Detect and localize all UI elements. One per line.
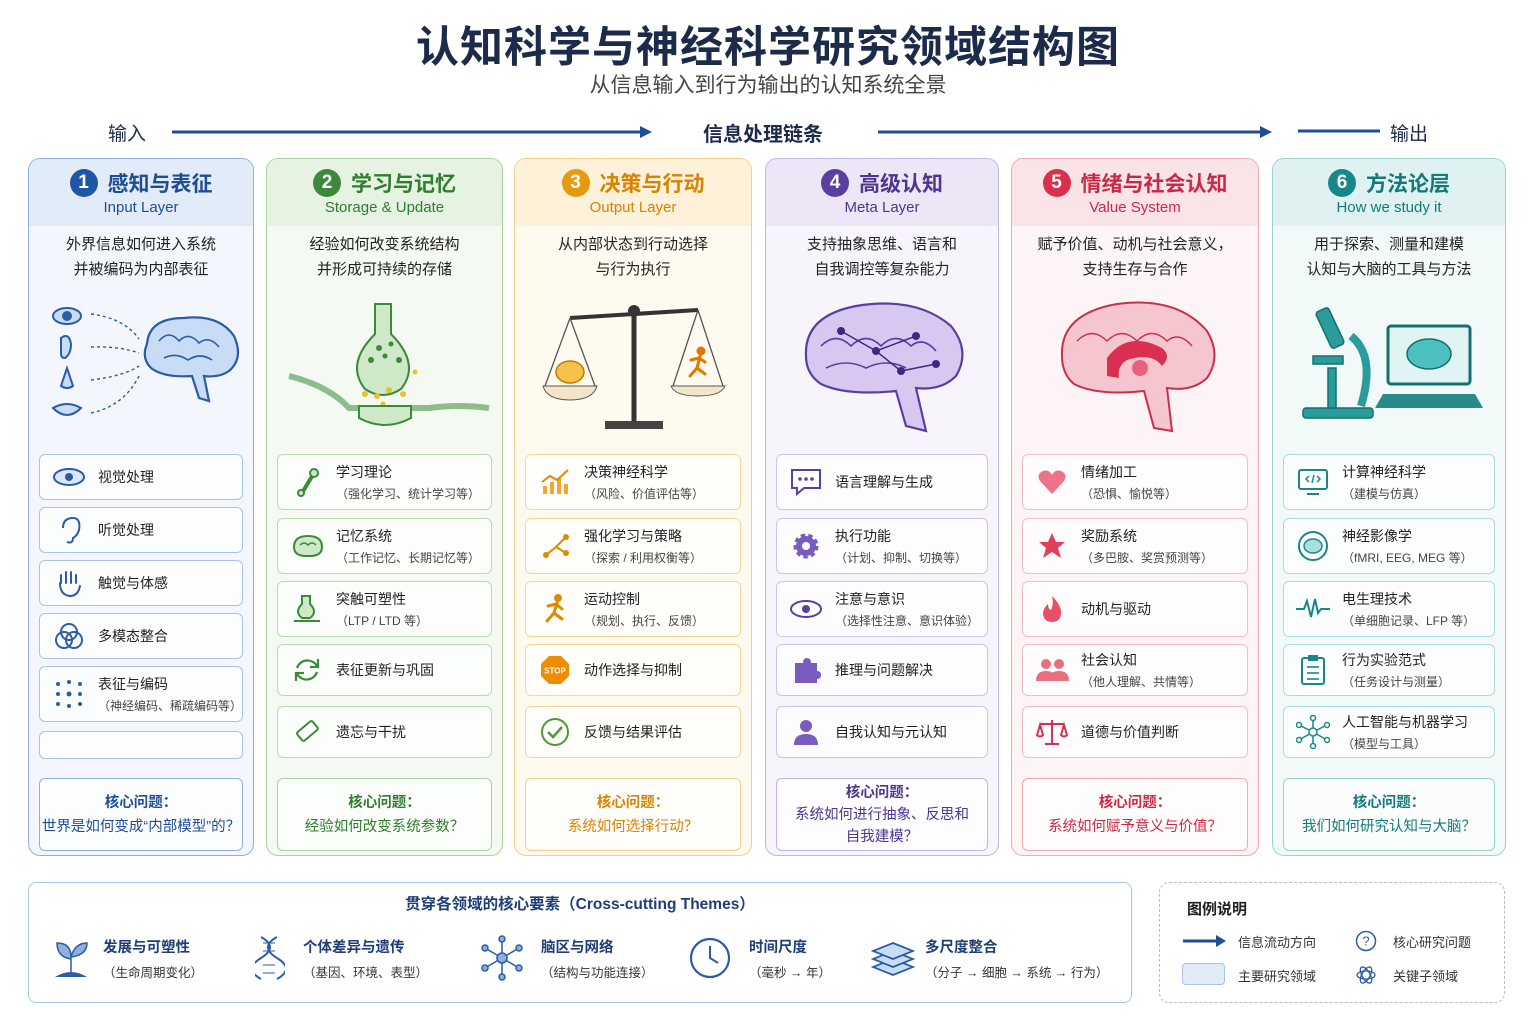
legend: flow arrow: [1183, 935, 1316, 950]
arrow: chain to output: [878, 126, 1272, 138]
core question 5: 核心问题：: [1099, 794, 1171, 810]
description 4: [807, 236, 957, 278]
header 3: 决策与行动: [600, 173, 704, 196]
item: memory systems: 记忆系统: [336, 528, 392, 544]
header 6: 方法论层: [1366, 173, 1450, 196]
item: learning theory: [277, 454, 492, 510]
item: computational neuroscience: [1283, 454, 1495, 510]
flow: output label: 输出: [1390, 124, 1428, 145]
panel 3: decision & action: [514, 158, 752, 856]
core question 2: [277, 778, 492, 851]
item: social cognition: 社会认知: [1081, 652, 1137, 668]
themes heading: 贯穿各领域的核心要素（Cross-cutting Themes）: [405, 896, 755, 913]
item: neuroimaging: 神经影像学: [1342, 528, 1412, 544]
item: RL policy: 强化学习与策略: [584, 528, 682, 544]
item: multimodal: 多模态整合: [98, 628, 168, 644]
item: AI & ML: 人工智能与机器学习: [1342, 714, 1468, 730]
item: motor control: 运动控制: [584, 591, 640, 607]
item: emotion: （恐惧、愉悦等）: [1081, 487, 1177, 501]
legend title: 图例说明: [1187, 901, 1247, 918]
description 5: 支持生存与合作: [1082, 261, 1188, 278]
description 3: [558, 236, 708, 278]
item: touch: 触觉与体感: [98, 575, 168, 591]
item: social cognition: （他人理解、共情等）: [1081, 675, 1201, 689]
legend: domain box: [1182, 963, 1316, 985]
item: reward: [1022, 518, 1248, 574]
item: action selection: [525, 644, 741, 696]
header 5: 5: [1051, 172, 1062, 193]
legend: core question: [1356, 930, 1471, 952]
item: feedback: [525, 706, 741, 758]
item: behavioral paradigms: 行为实验范式: [1342, 652, 1426, 668]
core question 5: 系统如何赋予意义与价值？: [1048, 818, 1222, 834]
description 3: 从内部状态到行动选择: [558, 236, 708, 253]
description 6: 认知与大脑的工具与方法: [1306, 261, 1472, 278]
item: neuroimaging: （fMRI, EEG, MEG 等）: [1342, 551, 1473, 565]
item: computational neuroscience: （建模与仿真）: [1342, 487, 1426, 501]
core question 4: 自我建模？: [846, 828, 918, 844]
core question 6: 我们如何研究认知与大脑？: [1302, 818, 1476, 834]
description 5: 赋予价值、动机与社会意义，: [1037, 236, 1232, 253]
theme: time scale: 时间尺度: [749, 940, 807, 956]
item: emotion: [1022, 454, 1248, 510]
item: motor control: [525, 581, 741, 637]
header 3: [515, 159, 751, 226]
header 5: [1012, 159, 1258, 226]
core question 4: 系统如何进行抽象、反思和: [795, 806, 969, 822]
item: learning theory: 学习理论: [336, 464, 392, 480]
header 2: Storage & Update: [325, 199, 444, 216]
item: action selection: STOP: [544, 666, 566, 676]
theme: brain networks: 脑区与网络: [541, 940, 614, 956]
item: representation update: [277, 644, 492, 696]
item: reward: 奖励系统: [1081, 528, 1137, 544]
item: self: 自我认知与元认知: [835, 724, 947, 740]
item: visual: [39, 454, 243, 500]
empty slot: [39, 731, 243, 759]
item: executive function: （计划、抑制、切换等）: [835, 551, 967, 565]
core question 6: [1283, 778, 1495, 851]
subtitle: 从信息输入到行为输出的认知系统全景: [590, 74, 946, 97]
header 3: 3: [570, 172, 581, 193]
core question 4: [776, 778, 988, 851]
description 2: 经验如何改变系统结构: [309, 236, 460, 253]
arrow: input to chain: [172, 126, 652, 138]
item: RL policy: [525, 518, 741, 574]
title: 认知科学与神经科学研究领域结构图: [416, 24, 1120, 72]
item: forgetting: [277, 706, 492, 758]
panel 4: higher cognition: [765, 158, 999, 856]
description 4: 自我调控等复杂能力: [814, 261, 950, 278]
legend: sub-domain: [1356, 966, 1458, 984]
item: motor control: （规划、执行、反馈）: [584, 614, 704, 628]
header 5: Value System: [1089, 199, 1181, 216]
illustration: scale: [542, 305, 726, 429]
illustration: purple brain network: [804, 302, 964, 432]
core question 1: 核心问题：: [105, 794, 177, 810]
illustration: microscope and monitor: [1302, 307, 1483, 419]
item: feedback: 反馈与结果评估: [584, 724, 682, 740]
header 4: 4: [830, 172, 840, 193]
item: motivation: [1022, 581, 1248, 637]
header 4: 高级认知: [859, 173, 943, 196]
description 5: [1037, 236, 1232, 278]
item: touch: [39, 560, 243, 606]
item: forgetting: 遗忘与干扰: [336, 724, 406, 740]
item: executive function: 执行功能: [835, 528, 891, 544]
illustration: synapse: [288, 303, 490, 426]
item: social cognition: [1022, 644, 1248, 696]
description 3: 与行为执行: [595, 261, 670, 278]
header 2: 2: [322, 172, 332, 193]
item: encoding: （神经编码、稀疏编码等）: [98, 699, 242, 713]
legend: core question: 核心研究问题: [1393, 935, 1471, 950]
item: attention: （选择性注意、意识体验）: [835, 614, 979, 628]
illustration: limbic brain: [1060, 302, 1216, 432]
header 2: 学习与记忆: [351, 173, 456, 196]
item: memory systems: [277, 518, 492, 574]
item: decision neuroscience: [525, 454, 741, 510]
header 5: 情绪与社会认知: [1080, 173, 1228, 196]
item: learning theory: （强化学习、统计学习等）: [336, 487, 480, 501]
item: computational neuroscience: 计算神经科学: [1342, 464, 1426, 480]
core question 6: 核心问题：: [1353, 794, 1425, 810]
item: electrophysiology: 电生理技术: [1342, 591, 1412, 607]
panel 5: emotion & social: [1011, 158, 1259, 856]
panel 6: methods: [1272, 158, 1506, 856]
item: reasoning: 推理与问题解决: [835, 662, 933, 678]
description 2: [309, 236, 460, 278]
item: encoding: 表征与编码: [98, 676, 168, 692]
core question 2: 核心问题：: [348, 794, 421, 810]
header 6: How we study it: [1336, 199, 1442, 216]
panel 1: perception: [28, 158, 254, 856]
core question 5: [1022, 778, 1248, 851]
theme: multiscale: （分子 → 细胞 → 系统 → 行为）: [925, 966, 1108, 980]
illustration: senses to brain: [51, 307, 240, 416]
description 6: 用于探索、测量和建模: [1314, 236, 1464, 253]
header 1: 1: [78, 172, 89, 193]
item: executive function: [776, 518, 988, 574]
item: electrophysiology: （单细胞记录、LFP 等）: [1342, 614, 1475, 628]
theme: multiscale: [871, 939, 1108, 980]
item: RL policy: （探索 / 利用权衡等）: [584, 551, 702, 565]
item: behavioral paradigms: （任务设计与测量）: [1342, 675, 1450, 689]
legend: domain box: 主要研究领域: [1238, 969, 1316, 984]
item: neuroimaging: [1283, 518, 1495, 574]
item: AI & ML: [1283, 706, 1495, 758]
item: decision neuroscience: （风险、价值评估等）: [584, 487, 704, 501]
item: memory systems: （工作记忆、长期记忆等）: [336, 551, 480, 565]
header 1: Input Layer: [103, 199, 179, 216]
theme: development: [55, 939, 203, 980]
item: synaptic plasticity: 突触可塑性: [336, 591, 406, 607]
core question 2: 经验如何改变系统参数？: [305, 818, 464, 834]
item: visual: 视觉处理: [98, 469, 154, 485]
core question 3: 核心问题：: [597, 794, 669, 810]
flow: output label: [1298, 124, 1428, 145]
description 6: [1306, 236, 1472, 278]
item: attention: 注意与意识: [835, 591, 905, 607]
theme: multiscale: 多尺度整合: [925, 940, 998, 956]
theme: development: （生命周期变化）: [103, 966, 203, 980]
item: encoding: [39, 666, 243, 722]
item: morality: [1022, 706, 1248, 758]
legend: sub-domain: 关键子领域: [1393, 969, 1458, 984]
theme: individual differences: 个体差异与遗传: [303, 940, 404, 956]
description 1: 并被编码为内部表征: [73, 261, 208, 278]
header 1: 感知与表征: [108, 173, 212, 196]
item: reward: （多巴胺、奖赏预测等）: [1081, 551, 1213, 565]
flow: chain label: 信息处理链条: [703, 124, 823, 146]
item: multimodal: [39, 613, 243, 659]
item: auditory: [39, 507, 243, 553]
legend: [1159, 882, 1505, 1003]
item: action selection: 动作选择与抑制: [584, 662, 682, 678]
item: attention: [776, 581, 988, 637]
item: reasoning: [776, 644, 988, 696]
header 1: [29, 159, 253, 226]
theme: brain networks: [481, 935, 654, 981]
theme: individual differences: [255, 936, 428, 980]
header 3: Output Layer: [590, 199, 676, 216]
item: language: [776, 454, 988, 510]
header 6: [1273, 159, 1505, 226]
description 4: 支持抽象思维、语言和: [807, 236, 957, 253]
header 4: [766, 159, 998, 226]
panel 2: learning & memory: [266, 158, 503, 856]
header 2: [267, 159, 502, 226]
description 2: 并形成可持续的存储: [317, 261, 452, 278]
core question 1: 世界是如何变成“内部模型”的？: [42, 818, 240, 834]
theme: brain networks: （结构与功能连接）: [541, 966, 654, 980]
item: synaptic plasticity: [277, 581, 492, 637]
core question 3: 系统如何选择行动？: [568, 818, 698, 834]
item: language: 语言理解与生成: [835, 474, 933, 490]
item: representation update: 表征更新与巩固: [336, 662, 434, 678]
core question 3: [525, 778, 741, 851]
header 6: 6: [1337, 172, 1347, 193]
item: emotion: 情绪加工: [1081, 464, 1137, 480]
header 4: Meta Layer: [844, 199, 920, 216]
theme: time scale: （毫秒 → 年）: [749, 966, 831, 980]
theme: individual differences: （基因、环境、表型）: [303, 966, 428, 980]
description 1: [66, 236, 216, 278]
panel: cross-cutting themes: [28, 882, 1132, 1003]
item: motivation: 动机与驱动: [1081, 601, 1151, 617]
item: electrophysiology: [1283, 581, 1495, 637]
legend: core question: ?: [1362, 934, 1370, 948]
item: morality: 道德与价值判断: [1081, 724, 1179, 740]
item: self: [776, 706, 988, 758]
legend: flow arrow: 信息流动方向: [1238, 935, 1316, 950]
theme: development: 发展与可塑性: [103, 940, 190, 956]
core question 1: [39, 778, 243, 851]
item: auditory: 听觉处理: [98, 522, 154, 538]
item: AI & ML: （模型与工具）: [1342, 737, 1426, 751]
description 1: 外界信息如何进入系统: [66, 236, 216, 253]
flow: input label: 输入: [108, 124, 146, 145]
theme: time scale: [690, 938, 831, 980]
item: decision neuroscience: 决策神经科学: [584, 464, 668, 480]
core question 4: 核心问题：: [846, 784, 918, 800]
item: synaptic plasticity: （LTP / LTD 等）: [336, 614, 428, 628]
item: behavioral paradigms: [1283, 644, 1495, 696]
